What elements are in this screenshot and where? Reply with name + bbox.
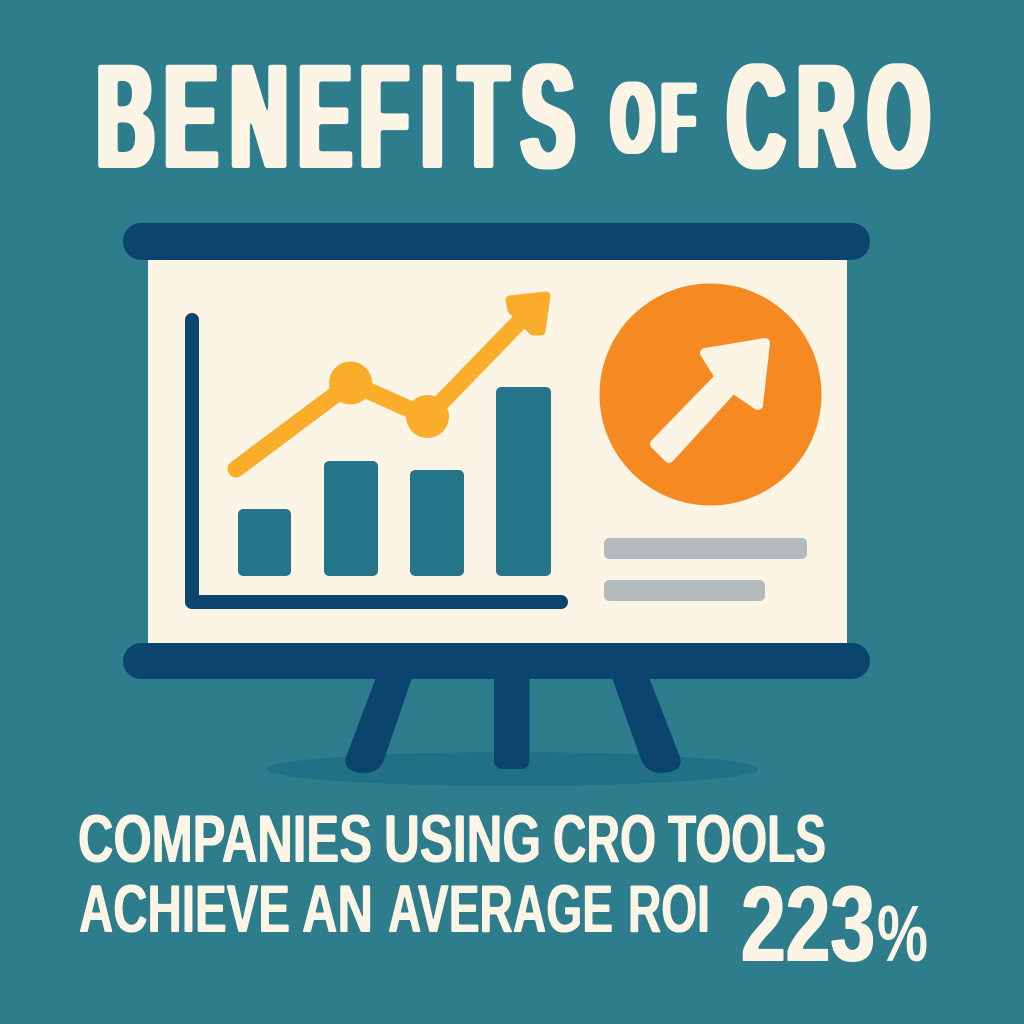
presentation board <box>123 223 870 773</box>
caption: CRO <box>553 801 656 877</box>
floor shadow <box>266 752 758 786</box>
title: CRO <box>727 33 930 200</box>
bottom bar <box>123 643 870 679</box>
caption <box>78 801 826 947</box>
bars <box>238 387 551 576</box>
screen <box>148 250 847 650</box>
title: OF <box>612 62 695 175</box>
caption: ACHIEVE <box>79 871 290 947</box>
caption: ROI <box>628 871 710 947</box>
icon: orange circle with arrow <box>600 284 822 506</box>
statistic: % <box>877 889 928 978</box>
caption: COMPANIES <box>78 801 372 877</box>
caption: TOOLS <box>668 801 826 877</box>
caption: USING <box>384 801 541 877</box>
axes <box>192 320 561 602</box>
text placeholder lines <box>604 538 807 601</box>
title <box>97 33 930 200</box>
top bar <box>123 223 870 260</box>
chart <box>192 296 561 602</box>
statistic: 223 <box>741 863 875 984</box>
title: BENEFITS <box>97 33 574 200</box>
caption: AN <box>302 871 373 947</box>
trend line <box>236 296 546 469</box>
caption: AVERAGE <box>388 871 613 947</box>
easel legs <box>345 672 681 773</box>
